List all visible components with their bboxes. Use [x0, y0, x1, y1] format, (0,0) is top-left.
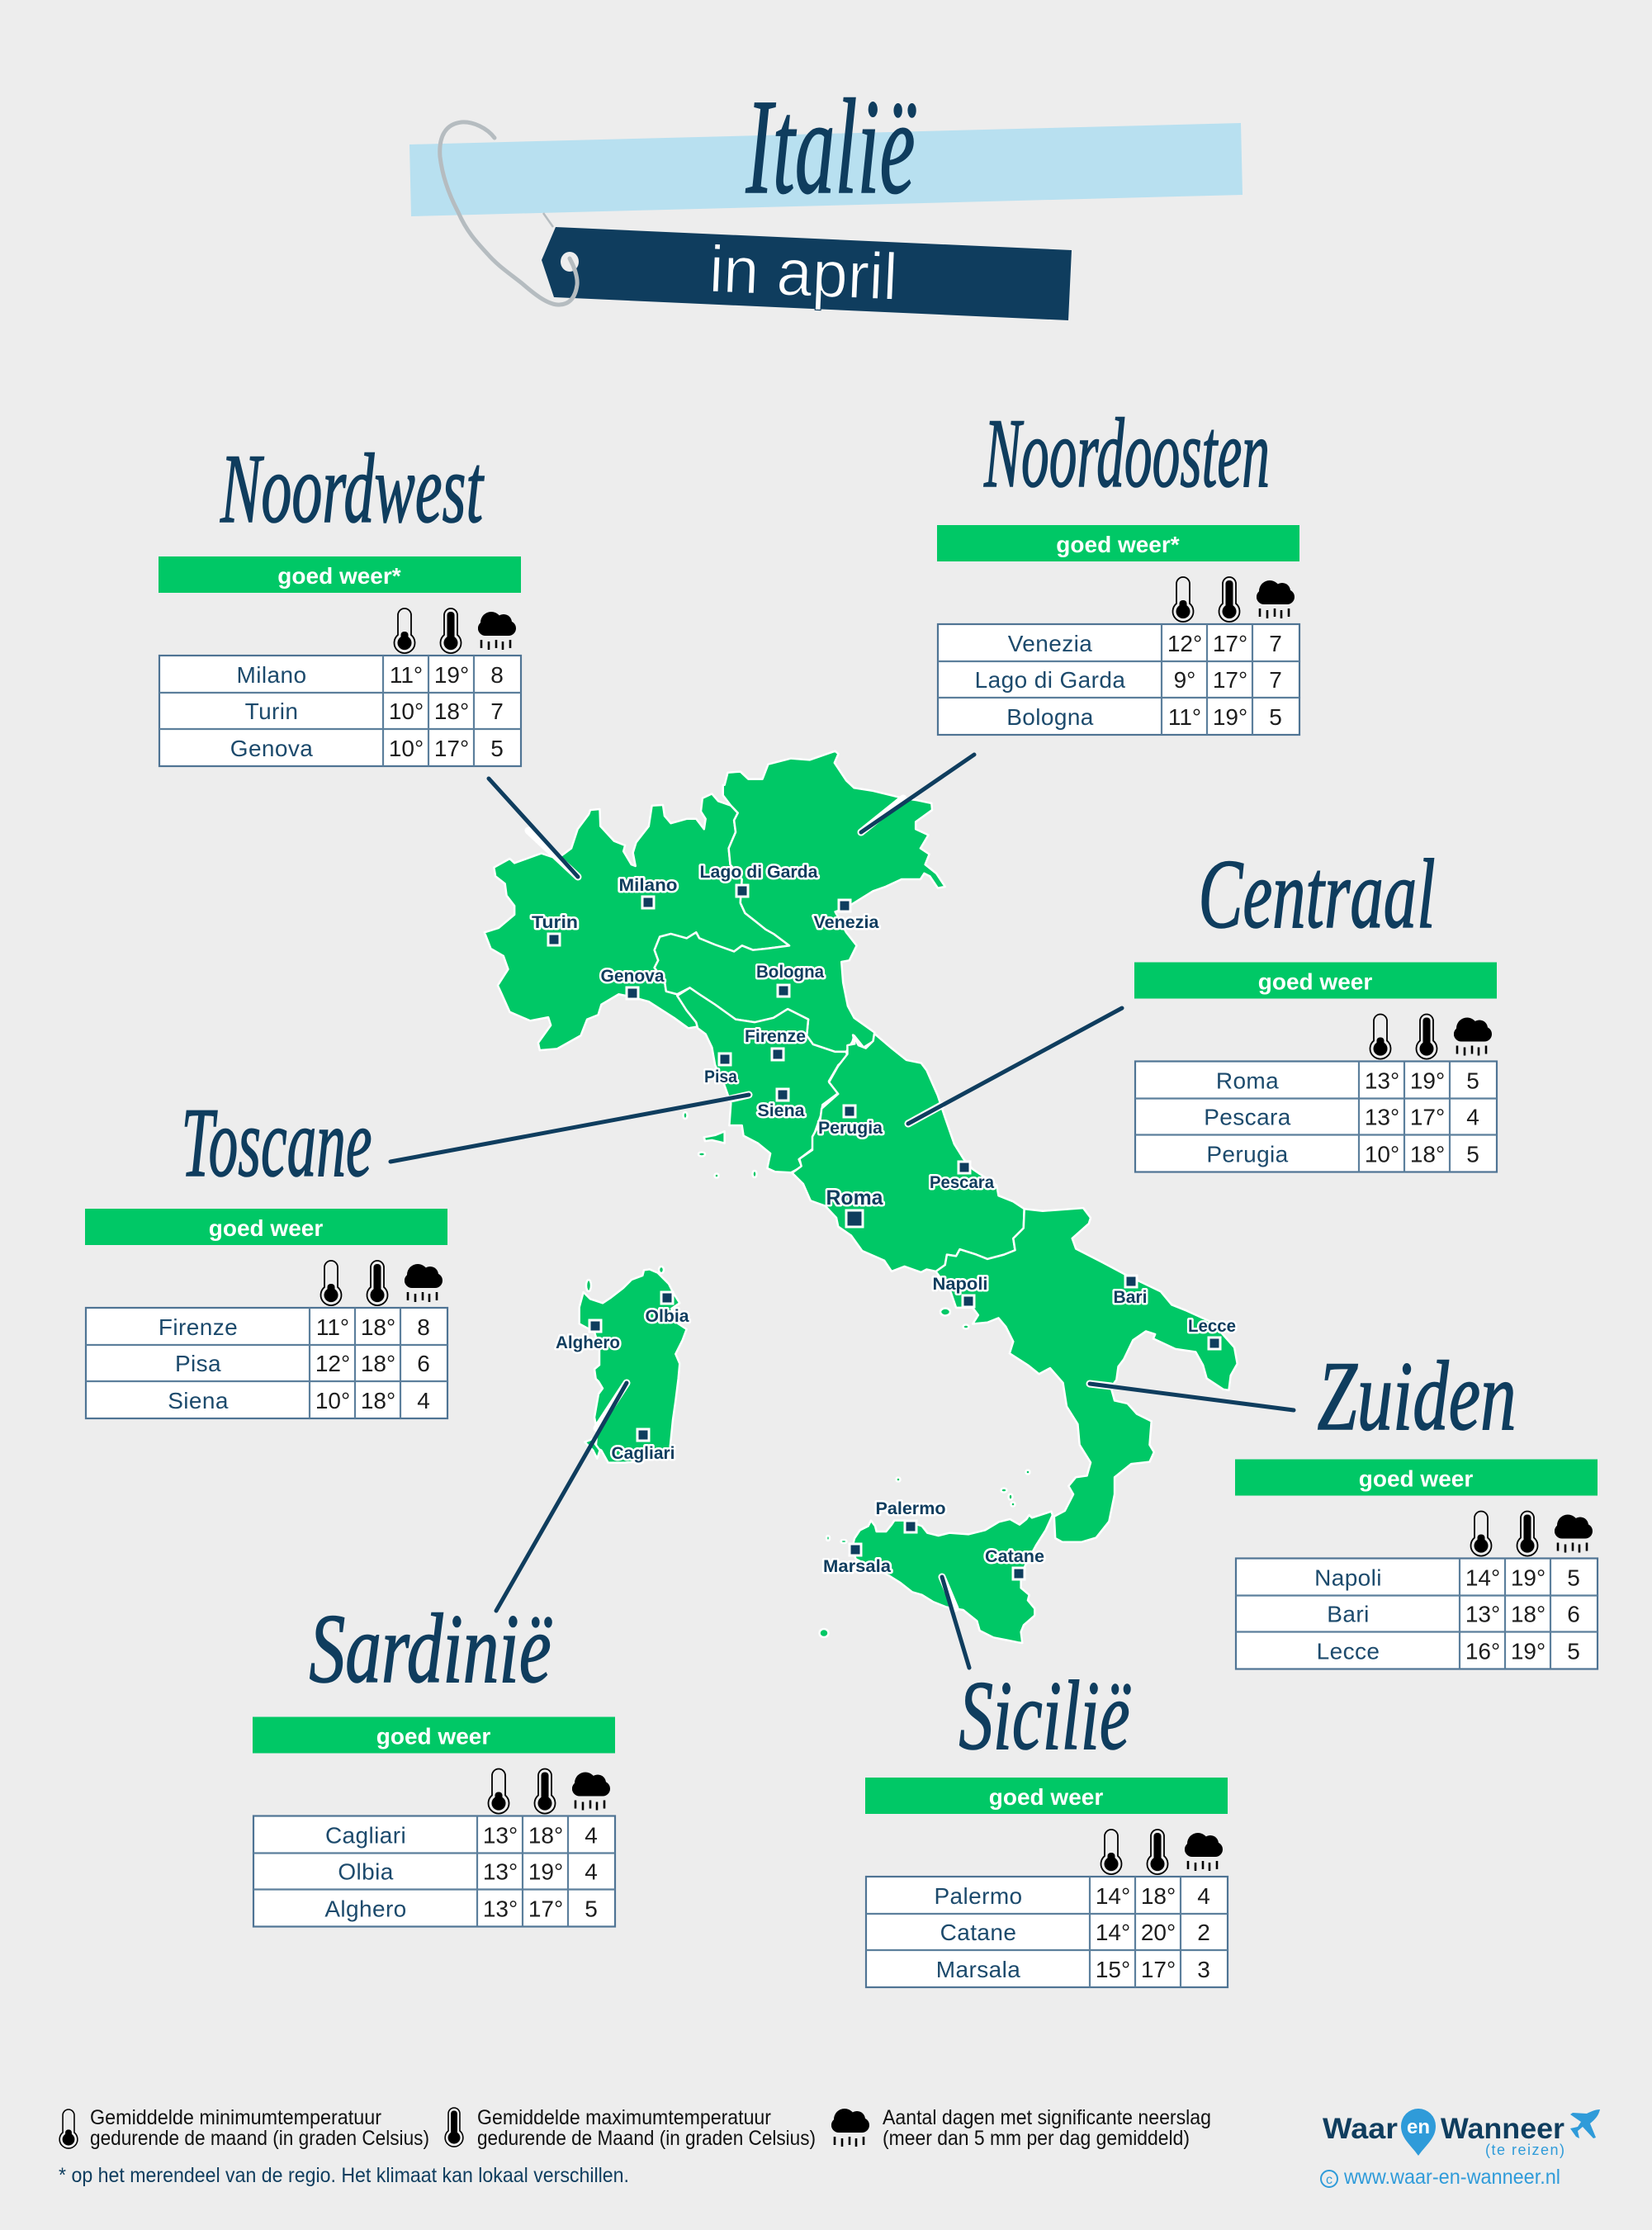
table block: Noordwest: 19°: [434, 662, 469, 688]
city: Palermo: Palermo: [875, 1499, 946, 1518]
city: Lecce: Lecce: [1188, 1317, 1236, 1336]
table block: Zuiden: 6: [1567, 1602, 1580, 1626]
logo: Waar en Wanneer: [1321, 2109, 1600, 2189]
city: Siena: [758, 1089, 805, 1120]
table block: Noordwest: 5: [490, 736, 504, 761]
title: Italië: [746, 71, 916, 222]
city: Lago di Garda: [700, 863, 818, 897]
panel: Centraal: [1134, 839, 1497, 1172]
table block: Noordoosten: 12°: [1167, 631, 1202, 656]
city: Turin: Turin: [532, 913, 578, 932]
table block: Toscane: goed weer: [209, 1215, 323, 1241]
city: Siena: Siena: [758, 1101, 805, 1120]
icon: plane: [1570, 2109, 1600, 2138]
city: Pisa: Pisa: [704, 1068, 737, 1087]
table block: Noordoosten: 5: [1269, 704, 1282, 730]
table block: Zuiden: 18°: [1511, 1602, 1545, 1626]
table block: Toscane: 10°: [315, 1388, 350, 1413]
city: Alghero: [556, 1320, 620, 1352]
table block: Toscane: 6: [417, 1351, 430, 1376]
table block: Sicilië: 14°: [1096, 1920, 1130, 1945]
table block: Sardinië: 13°: [483, 1859, 518, 1884]
city: Venezia: [814, 900, 879, 932]
region: central: [792, 1034, 1025, 1272]
icon: map pin: [1401, 2109, 1436, 2156]
legend text: maximum temperature: [477, 2106, 816, 2150]
title band: Italië: [409, 71, 1243, 227]
table block: Toscane: 8: [417, 1314, 430, 1340]
city: Venezia: Venezia: [814, 913, 879, 932]
city: Milano: [619, 876, 677, 908]
table block: Sicilië: [865, 1778, 1228, 1987]
table block: Toscane: Siena: [168, 1388, 229, 1413]
table block: Centraal: 4: [1466, 1105, 1479, 1129]
region: north-west: [485, 793, 789, 1050]
table block: Noordwest: goed weer*: [277, 563, 401, 589]
city: Pescara: Pescara: [930, 1173, 994, 1192]
table block: Toscane: 11°: [316, 1314, 349, 1340]
table block: Centraal: Roma: [1216, 1068, 1279, 1093]
logo: Waar en Wanneer: Waar: [1323, 2113, 1398, 2145]
table block: Toscane: 18°: [361, 1351, 395, 1376]
table block: Sardinië: Cagliari: [325, 1823, 406, 1848]
heading: Centraal: Centraal: [1199, 839, 1435, 949]
leader line: Sardinië: [496, 1383, 627, 1611]
leader line: Zuiden: [1090, 1384, 1294, 1410]
table block: Toscane: [85, 1209, 447, 1418]
table block: Noordoosten: 9°: [1174, 667, 1195, 693]
table block: Sardinië: 19°: [528, 1859, 563, 1884]
legend: [59, 2106, 1211, 2150]
city: Turin: [532, 913, 578, 945]
table block: Toscane: 4: [417, 1388, 430, 1413]
legend text: rain days: (meer dan 5 mm per dag gemiddeld): [883, 2127, 1190, 2150]
legend text: rain days: [883, 2106, 1211, 2150]
city: Olbia: Olbia: [646, 1307, 689, 1326]
panel: Sardinië: [253, 1593, 615, 1927]
heading: Noordoosten: Noordoosten: [983, 398, 1270, 508]
city: Perugia: Perugia: [818, 1119, 883, 1138]
leader line: Toscane: [391, 1095, 749, 1162]
table block: Noordoosten: Venezia: [1008, 631, 1092, 656]
table block: Noordoosten: 17°: [1213, 667, 1247, 693]
panel: Toscane: [85, 1087, 447, 1418]
heading: Sicilië: Sicilië: [959, 1660, 1131, 1770]
table block: Zuiden: Lecce: [1317, 1638, 1380, 1664]
table block: Noordwest: 18°: [434, 698, 469, 724]
table block: Zuiden: goed weer: [1359, 1466, 1473, 1491]
map of Italy: [485, 751, 1238, 1643]
panel: Noordwest: [159, 433, 521, 766]
city: Milano: Milano: [619, 876, 677, 895]
panel: Zuiden: [1235, 1341, 1598, 1669]
table block: Zuiden: Bari: [1327, 1602, 1370, 1626]
city: Genova: Genova: [601, 967, 665, 986]
table block: Zuiden: 5: [1567, 1565, 1580, 1590]
legend text: maximum temperature: gedurende de Maand (in graden Celsius): [477, 2127, 816, 2150]
city: Alghero: Alghero: [556, 1333, 620, 1352]
city: Napoli: Napoli: [933, 1275, 987, 1294]
table block: Centraal: Perugia: [1206, 1141, 1289, 1167]
table block: Noordwest: 10°: [389, 698, 424, 724]
city: Genova: [601, 967, 665, 999]
table block: Noordoosten: 11°: [1168, 704, 1201, 730]
table block: Zuiden: Napoli: [1314, 1565, 1382, 1590]
city: Marsala: Marsala: [823, 1557, 891, 1576]
leader line: Noordoosten: [861, 755, 974, 832]
heading: Sardinië: Sardinië: [309, 1593, 552, 1703]
city: Pescara: [930, 1162, 994, 1192]
table block: Sicilië: goed weer: [989, 1784, 1103, 1810]
city: Marsala: [823, 1544, 891, 1576]
table block: Noordoosten: 17°: [1213, 631, 1247, 656]
table block: Toscane: Firenze: [159, 1314, 238, 1340]
logo: Waar en Wanneer: en: [1407, 2116, 1430, 2138]
table block: Centraal: 5: [1466, 1141, 1479, 1167]
table block: Sicilië: 18°: [1141, 1883, 1176, 1909]
table block: Noordoosten: [937, 525, 1299, 735]
table block: Noordwest: 7: [490, 698, 504, 724]
table block: Centraal: 10°: [1365, 1141, 1399, 1167]
region: Sardinia: [580, 1269, 687, 1463]
website: c: [1326, 2173, 1332, 2187]
city: Roma: [826, 1186, 884, 1227]
table block: Noordwest: Turin: [245, 698, 298, 724]
table block: Sardinië: 17°: [528, 1896, 563, 1922]
table block: Sardinië: 5: [585, 1896, 598, 1922]
legend text: rain days: Aantal dagen met significante neerslag: [883, 2106, 1211, 2129]
table block: Sardinië: Alghero: [324, 1896, 407, 1922]
leader line: Noordwest: [489, 779, 578, 877]
city: Bari: [1113, 1276, 1148, 1307]
metal ring of the tag: [440, 122, 577, 305]
subtitle tag: in april: [542, 227, 1072, 320]
table block: Zuiden: 5: [1567, 1638, 1580, 1664]
table block: Noordoosten: goed weer*: [1056, 532, 1180, 557]
table block: Zuiden: 19°: [1511, 1565, 1545, 1590]
table block: Sicilië: 2: [1197, 1920, 1210, 1945]
city: Lago di Garda: Lago di Garda: [700, 863, 818, 882]
table block: Noordwest: Milano: [237, 662, 306, 688]
city: Palermo: [875, 1499, 946, 1532]
table block: Zuiden: 19°: [1511, 1638, 1545, 1664]
table block: Noordwest: 10°: [389, 736, 424, 761]
city: Cagliari: [611, 1429, 675, 1463]
table block: Centraal: 17°: [1410, 1105, 1445, 1129]
legend text: minimum temperature: Gemiddelde minimumtemperatuur: [90, 2106, 381, 2129]
table block: Noordwest: [159, 556, 521, 766]
table block: Sardinië: 18°: [528, 1823, 563, 1848]
small islands: [585, 1112, 1030, 1637]
leader line: Centraal: [908, 1008, 1122, 1124]
table block: Centraal: 13°: [1365, 1105, 1399, 1129]
table block: Sicilië: Catane: [940, 1920, 1016, 1945]
table block: Noordwest: 11°: [390, 662, 423, 688]
table block: Sardinië: Olbia: [338, 1859, 394, 1884]
table block: Sardinië: 4: [585, 1859, 598, 1884]
heading: Noordwest: Noordwest: [220, 433, 485, 543]
city: Perugia: [818, 1106, 883, 1138]
table block: Noordoosten: Bologna: [1006, 704, 1094, 730]
table block: Centraal: 19°: [1410, 1068, 1445, 1093]
city: Catane: Catane: [985, 1547, 1044, 1566]
table block: Zuiden: [1235, 1460, 1598, 1669]
table block: Sardinië: 4: [585, 1823, 598, 1848]
city: Firenze: Firenze: [745, 1027, 806, 1046]
table block: Sicilië: 3: [1197, 1957, 1210, 1982]
table block: Sardinië: 13°: [483, 1896, 518, 1922]
region: north-east: [655, 751, 945, 1052]
city: Napoli: [933, 1275, 987, 1307]
icon: rain cloud: [831, 2109, 869, 2147]
table block: Sicilië: Palermo: [934, 1883, 1023, 1909]
heading: Toscane: Toscane: [182, 1087, 372, 1197]
city: Roma: Roma: [826, 1186, 884, 1210]
table block: Toscane: 18°: [361, 1314, 395, 1340]
heading: Zuiden: Zuiden: [1318, 1341, 1516, 1451]
table block: Sardinië: goed weer: [376, 1724, 490, 1749]
table block: Noordoosten: 19°: [1213, 704, 1247, 730]
leader line: Sicilië: [942, 1577, 969, 1668]
city: Pisa: [704, 1053, 737, 1087]
table block: Centraal: 13°: [1365, 1068, 1399, 1093]
table block: Centraal: Pescara: [1204, 1105, 1291, 1129]
icon: maximum thermometer: [445, 2108, 463, 2147]
website: www.waar-en-wanneer.nl: [1343, 2166, 1560, 2189]
table block: Sicilië: 14°: [1096, 1883, 1130, 1909]
table block: Sardinië: [253, 1717, 615, 1927]
table block: Centraal: 18°: [1410, 1141, 1445, 1167]
table block: Zuiden: 13°: [1465, 1602, 1500, 1626]
city: Catane: [985, 1547, 1044, 1579]
region: south: [936, 1208, 1238, 1542]
city: Cagliari: Cagliari: [611, 1444, 675, 1463]
table block: Noordwest: 17°: [434, 736, 469, 761]
city markers and labels: [532, 863, 1236, 1579]
table block: Sicilië: 20°: [1141, 1920, 1176, 1945]
footnote: * op het merendeel van de regio. Het klimaat kan lokaal verschillen.: [59, 2164, 629, 2187]
region: Sicily: [852, 1512, 1053, 1643]
table block: Noordwest: Genova: [230, 736, 313, 761]
table block: Toscane: Pisa: [175, 1351, 221, 1376]
city: Olbia: [646, 1292, 689, 1326]
table block: Sicilië: 15°: [1096, 1957, 1130, 1982]
table block: Centraal: [1134, 963, 1497, 1172]
table block: Zuiden: 16°: [1465, 1638, 1500, 1664]
table block: Sicilië: Marsala: [936, 1957, 1020, 1982]
table block: Toscane: 12°: [315, 1351, 350, 1376]
legend text: minimum temperature: [90, 2106, 429, 2150]
table block: Sardinië: 13°: [483, 1823, 518, 1848]
panel: Sicilië: [865, 1660, 1228, 1987]
city: Bologna: Bologna: [756, 963, 824, 982]
subtitle text: in april: [708, 232, 899, 314]
city: Lecce: [1188, 1317, 1236, 1349]
logo: Waar en Wanneer: (te reizen): [1485, 2142, 1564, 2158]
table block: Toscane: 18°: [361, 1388, 395, 1413]
legend text: minimum temperature: gedurende de maand (in graden Celsius): [90, 2127, 429, 2150]
table block: Centraal: goed weer: [1258, 969, 1372, 994]
legend text: maximum temperature: Gemiddelde maximumtemperatuur: [477, 2106, 771, 2129]
city: Bari: Bari: [1113, 1288, 1148, 1307]
logo: Waar en Wanneer: Wanneer: [1441, 2113, 1564, 2145]
table block: Noordwest: 8: [490, 662, 504, 688]
table block: Sicilië: 17°: [1141, 1957, 1176, 1982]
table block: Zuiden: 14°: [1465, 1565, 1500, 1590]
table block: Noordoosten: 7: [1269, 667, 1282, 693]
icon: minimum thermometer: [59, 2109, 78, 2148]
table block: Noordoosten: 7: [1269, 631, 1282, 656]
city: Firenze: [745, 1027, 806, 1060]
region: Tuscany: [677, 987, 848, 1172]
table block: Centraal: 5: [1466, 1068, 1479, 1093]
city: Bologna: [756, 963, 824, 997]
table block: Sicilië: 4: [1197, 1883, 1210, 1909]
panel: Noordoosten: [937, 398, 1299, 735]
table block: Noordoosten: Lago di Garda: [975, 667, 1125, 693]
